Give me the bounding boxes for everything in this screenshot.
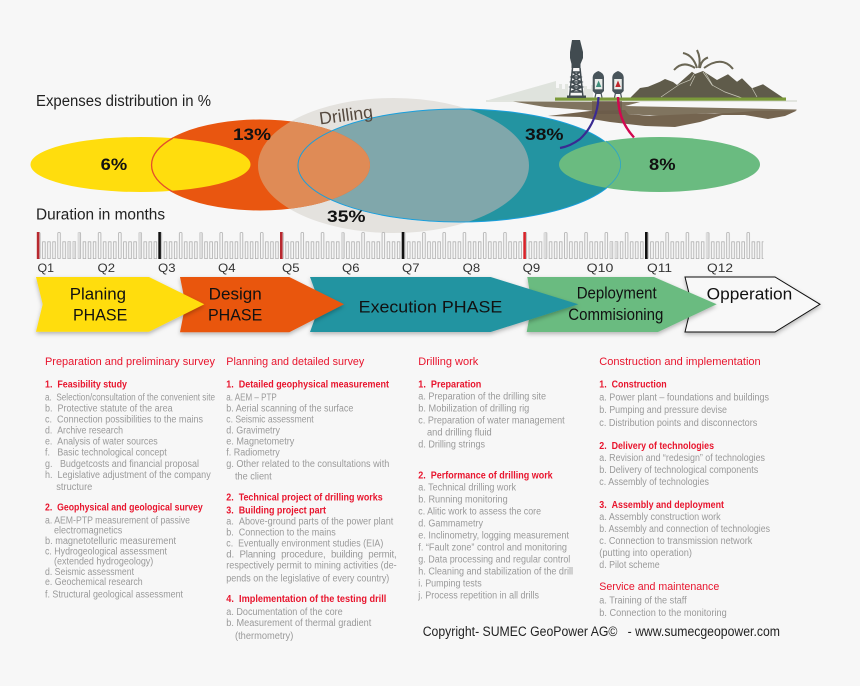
timeline ruler — [37, 232, 764, 259]
section: assembly and deployment: (putting into operation) — [599, 548, 692, 559]
section: feasibility study: h. Legislative adjustment of the company — [45, 470, 211, 481]
section: preparation: c. Preparation of water management — [418, 416, 565, 427]
quarter labels: Q11 — [647, 261, 672, 275]
section: implementation of the testing drill: 4. Implementation of the testing drill — [226, 594, 387, 605]
arrow: Design PHASE — [180, 277, 344, 332]
section: performance of drilling work: d. Gammametry — [418, 519, 483, 530]
ellipse: planning 6% — [30, 137, 250, 192]
ellipse: deployment 8% — [559, 137, 760, 192]
section: feasibility study: b. Protective statute of the area — [45, 403, 173, 414]
section: assembly and deployment: d. Pilot scheme — [599, 560, 660, 571]
section: service and maintenance: Service and maintenance — [599, 581, 719, 593]
arrow: Deployment Commisioning — [527, 277, 717, 332]
panel: drilling work — [417, 356, 573, 601]
arrow: Opperation: Opperation — [707, 284, 792, 303]
heading: duration in months: Duration in months — [36, 206, 165, 224]
section: feasibility study: g. Budgetcosts and financial proposal — [45, 459, 199, 470]
label: 13%: 13% — [233, 125, 271, 144]
arrow: Planing PHASE: Planing — [70, 284, 126, 303]
section: performance of drilling work: h. Cleaning and stabilization of the drill — [418, 567, 573, 578]
section: delivery of technologies: a. Revision and “redesign” of technologies — [599, 453, 765, 464]
section: geophysical and geological survey: b. magnetotelluric measurement — [45, 536, 176, 547]
section: implementation of the testing drill — [226, 594, 387, 642]
section: performance of drilling work: j. Process repetition in all drills — [417, 590, 539, 601]
section: delivery of technologies: 2. Delivery of technologies — [599, 441, 714, 452]
section: delivery of technologies — [599, 441, 765, 488]
section: detailed geophysical measurement: b. Aerial scanning of the surface — [226, 403, 353, 414]
illustration: geothermal landscape — [486, 40, 797, 127]
quarter labels: Q9 — [523, 261, 541, 275]
section: preparation: b. Mobilization of drilling rig — [418, 404, 529, 415]
section: feasibility study: e. Analysis of water sources — [45, 437, 158, 448]
panel: preparation and preliminary survey — [45, 356, 215, 601]
panel: planning and detailed survey — [226, 356, 397, 642]
section: delivery of technologies: c. Assembly of technologies — [599, 477, 709, 488]
quarter labels: Q1 — [38, 261, 54, 275]
section: service and maintenance: b. Connection to the monitoring — [599, 608, 727, 619]
chart: overlapping expense ellipses — [30, 98, 760, 233]
arrow: Planing PHASE — [36, 277, 204, 332]
section: assembly and deployment: b. Assembly and connection of technologies — [599, 524, 770, 535]
section: construction: b. Pumping and pressure devise — [599, 405, 727, 416]
panel: construction and implementation — [599, 356, 770, 619]
icon: water tank — [593, 71, 604, 98]
section: detailed geophysical measurement: c. Seismic assessment — [226, 415, 314, 426]
icon: drilling derrick — [567, 40, 586, 98]
section: feasibility study: 1. Feasibility study — [45, 379, 127, 390]
column heading: Drilling work — [418, 356, 479, 368]
section: technical project and building part: c. Eventually environment studies (EIA) — [226, 539, 383, 550]
section: geophysical and geological survey: d. Seismic assessment — [45, 567, 134, 578]
section: feasibility study: c. Connection possibilities to the mains — [45, 415, 203, 426]
section: geophysical and geological survey: e. Geochemical research — [45, 577, 143, 588]
section: feasibility study: structure — [56, 482, 92, 493]
label: Deployment Commisioning: Commisioning — [568, 305, 663, 324]
quarter labels: Q3 — [158, 261, 176, 275]
section: preparation — [418, 379, 565, 451]
label: Drilling: Drilling — [318, 102, 374, 128]
copyright line: Copyright- SUMEC GeoPower AG© - www.sumecgeopower.com — [423, 624, 780, 639]
section: preparation: 1. Preparation — [418, 379, 481, 390]
ellipse: execution 38% — [298, 110, 620, 222]
section: assembly and deployment: c. Connection to transmission network — [599, 536, 752, 547]
section: technical project and building part: pends on the legislative of every country) — [226, 574, 389, 585]
label: 6%: 6% — [101, 155, 127, 174]
column heading: Preparation and preliminary survey — [45, 356, 215, 368]
section: preparation: d. Drilling strings — [418, 440, 485, 451]
quarter labels — [38, 261, 733, 275]
pipe: production well — [618, 97, 634, 138]
arrow: Execution PHASE — [310, 277, 578, 332]
section: performance of drilling work: 2. Performance of drilling work — [418, 471, 553, 482]
section: performance of drilling work: b. Running monitoring — [418, 495, 508, 506]
section: feasibility study: a. Selection/consultation of the convenient site — [45, 392, 215, 403]
arrow: Design PHASE: PHASE — [208, 306, 262, 325]
section: detailed geophysical measurement: e. Magnetometry — [226, 437, 294, 448]
section: detailed geophysical measurement: f. Radiometry — [226, 448, 280, 459]
quarter labels: Q2 — [98, 261, 115, 275]
label: 8%: 8% — [649, 155, 676, 174]
section: construction: c. Distribution points and disconnectors — [599, 418, 757, 429]
quarter labels: Q6 — [342, 261, 360, 275]
pipe: injection well — [560, 97, 598, 148]
arrow: Execution PHASE: Execution PHASE — [359, 297, 502, 316]
section: construction: 1. Construction — [599, 379, 667, 390]
section: implementation of the testing drill: a. Documentation of the core — [226, 607, 343, 618]
section: geophysical and geological survey — [45, 503, 203, 601]
section: technical project and building part: 3. Building project part — [226, 505, 327, 516]
section: detailed geophysical measurement: a. AEM – PTP — [226, 392, 277, 403]
section: implementation of the testing drill: b. Measurement of thermal gradient — [226, 618, 372, 629]
quarter labels: Q8 — [463, 261, 481, 275]
quarter labels: Q12 — [707, 261, 733, 275]
section: geophysical and geological survey: c. Hydrogeological assessment — [45, 546, 167, 557]
quarter labels: Q4 — [218, 261, 236, 275]
section: technical project and building part: d. Planning procedure, building permit, — [226, 550, 397, 561]
section: preparation: and drilling fluid — [427, 427, 492, 438]
section: geophysical and geological survey: electromagnetics — [54, 526, 122, 537]
label: Deployment Commisioning — [568, 283, 663, 324]
heading: expenses distribution: Expenses distribution in % — [36, 93, 211, 110]
section: construction — [599, 379, 769, 429]
icon: steam tank — [612, 71, 624, 98]
section: geophysical and geological survey: a. AEM-PTP measurement of passive — [45, 516, 190, 527]
quarter labels: Q5 — [282, 261, 300, 275]
ellipse: design 13% — [150, 120, 370, 210]
section: technical project and building part: 2. Technical project of drilling works — [226, 492, 383, 503]
section: detailed geophysical measurement: 1. Detailed geophysical measurement — [226, 379, 390, 390]
section: performance of drilling work: e. Inclinometry, logging measurement — [418, 531, 569, 542]
section: implementation of the testing drill: (thermometry) — [235, 631, 293, 642]
section: detailed geophysical measurement: g. Other related to the consultations with — [226, 459, 389, 470]
section: technical project and building part: respectively permit to mining activities (de- — [226, 561, 397, 572]
section: technical project and building part: a. Above-ground parts of the power plant — [226, 516, 394, 527]
quarter labels: Q7 — [402, 261, 420, 275]
section: detailed geophysical measurement: d. Gravimetry — [226, 426, 280, 437]
section: delivery of technologies: b. Delivery of technological components — [599, 465, 758, 476]
section: service and maintenance: a. Training of the staff — [599, 595, 687, 606]
section: assembly and deployment: 3. Assembly and deployment — [599, 500, 725, 511]
column heading: Planning and detailed survey — [226, 356, 365, 368]
ellipse: drilling 35% — [258, 98, 529, 233]
section: technical project and building part — [226, 492, 397, 585]
section: construction: a. Power plant – foundations and buildings — [599, 392, 769, 403]
arrow: Opperation — [685, 277, 820, 332]
section: performance of drilling work: f. “Fault zone” control and monitoring — [418, 543, 567, 554]
section: geophysical and geological survey: 2. Geophysical and geological survey — [45, 503, 203, 514]
section: detailed geophysical measurement — [226, 379, 390, 483]
label: 38%: 38% — [525, 125, 564, 144]
section: geophysical and geological survey: (extended hydrogeology) — [54, 557, 153, 568]
section: performance of drilling work: i. Pumping tests — [418, 579, 482, 590]
section: assembly and deployment — [599, 500, 770, 571]
section: feasibility study: d. Archive research — [45, 426, 123, 437]
section: feasibility study — [45, 379, 215, 493]
arrow: Design PHASE: Design — [209, 284, 262, 303]
column heading: Construction and implementation — [599, 356, 761, 368]
section: assembly and deployment: a. Assembly construction work — [599, 512, 721, 523]
section: geophysical and geological survey: f. Structural geological assessment — [45, 590, 183, 601]
section: performance of drilling work: g. Data processing and regular control — [418, 555, 570, 566]
arrow: Planing PHASE: PHASE — [73, 306, 127, 325]
quarter labels: Q10 — [587, 261, 614, 275]
label: 35%: 35% — [327, 207, 366, 226]
section: detailed geophysical measurement: the client — [235, 472, 272, 483]
section: technical project and building part: b. Connection to the mains — [226, 527, 336, 538]
section: service and maintenance — [599, 581, 727, 619]
phase arrows — [36, 277, 820, 332]
section: preparation: a. Preparation of the drilling site — [418, 392, 546, 403]
section: feasibility study: f. Basic technological concept — [45, 448, 167, 459]
section: performance of drilling work: c. Alitic work to assess the core — [418, 507, 541, 518]
section: performance of drilling work — [417, 471, 573, 601]
section: performance of drilling work: a. Technical drilling work — [418, 483, 516, 494]
label: Deployment Commisioning: Deployment — [577, 283, 657, 302]
